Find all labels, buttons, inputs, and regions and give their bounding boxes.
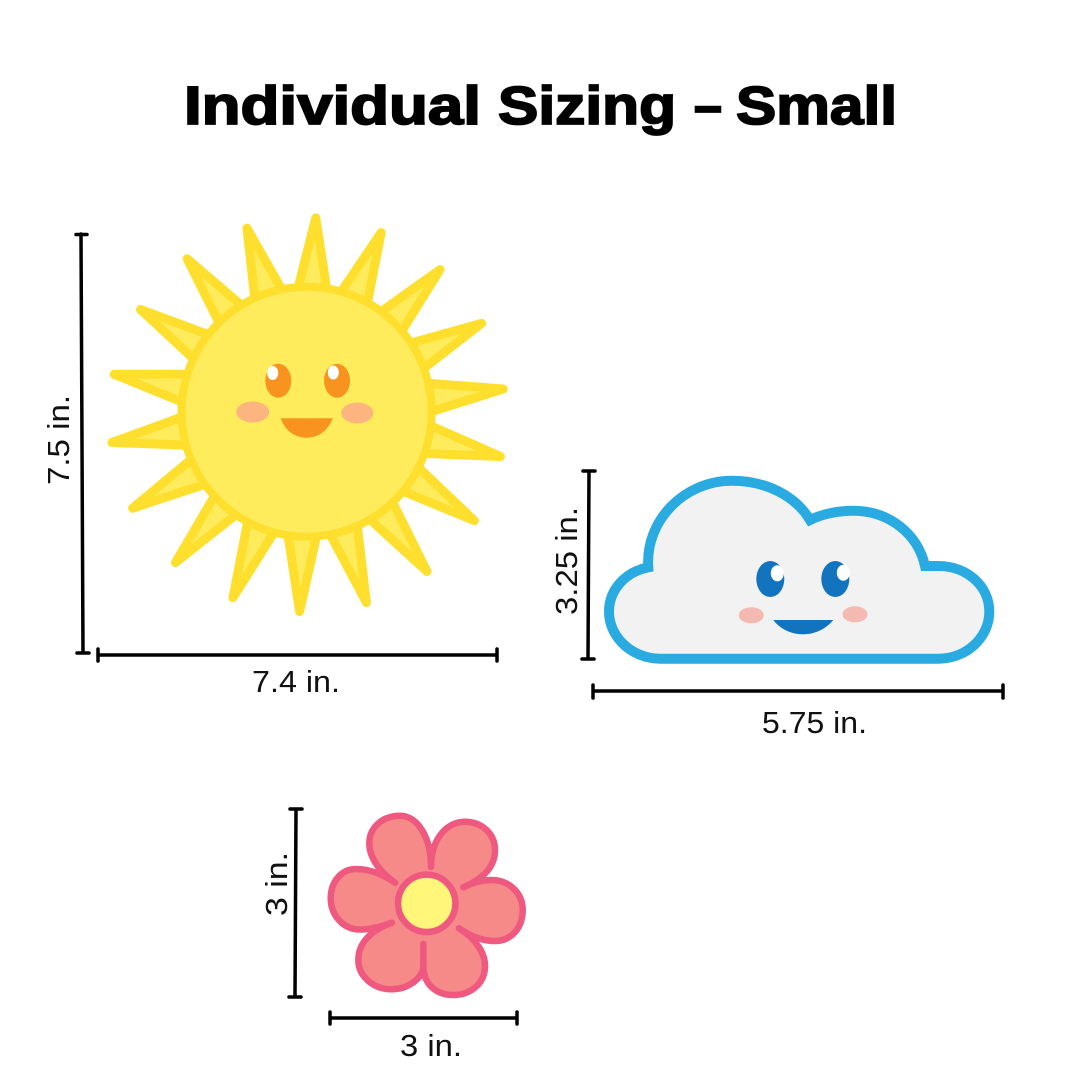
cloud height dimension: 3.25 in. <box>549 507 584 615</box>
cloud height dimension <box>549 471 595 659</box>
sun width dimension <box>98 649 497 699</box>
title: Individual <box>184 76 481 136</box>
cloud body <box>609 481 989 659</box>
sun face <box>236 364 373 438</box>
sun disc <box>182 287 432 537</box>
flower height dimension: 3 in. <box>259 852 294 916</box>
flower height dimension <box>259 809 302 997</box>
icon: smiling sun <box>110 217 505 612</box>
cloud face <box>739 561 868 634</box>
sun width dimension: 7.4 in. <box>252 664 340 699</box>
flower width dimension: 3 in. <box>400 1028 462 1063</box>
cloud width dimension <box>593 685 1003 740</box>
icon: smiling cloud <box>609 481 989 659</box>
title: Small <box>736 76 897 136</box>
flower petals <box>331 816 523 995</box>
flower width dimension <box>330 1012 517 1063</box>
title: – <box>694 76 722 136</box>
title <box>184 76 897 136</box>
sun rays <box>110 217 505 612</box>
sun height dimension: 7.5 in. <box>41 395 76 485</box>
title: Sizing <box>498 76 676 136</box>
sun height dimension <box>41 234 89 653</box>
icon: pink flower <box>331 816 523 995</box>
cloud width dimension: 5.75 in. <box>762 705 867 740</box>
flower base fill <box>385 861 469 945</box>
flower centre <box>398 875 455 932</box>
